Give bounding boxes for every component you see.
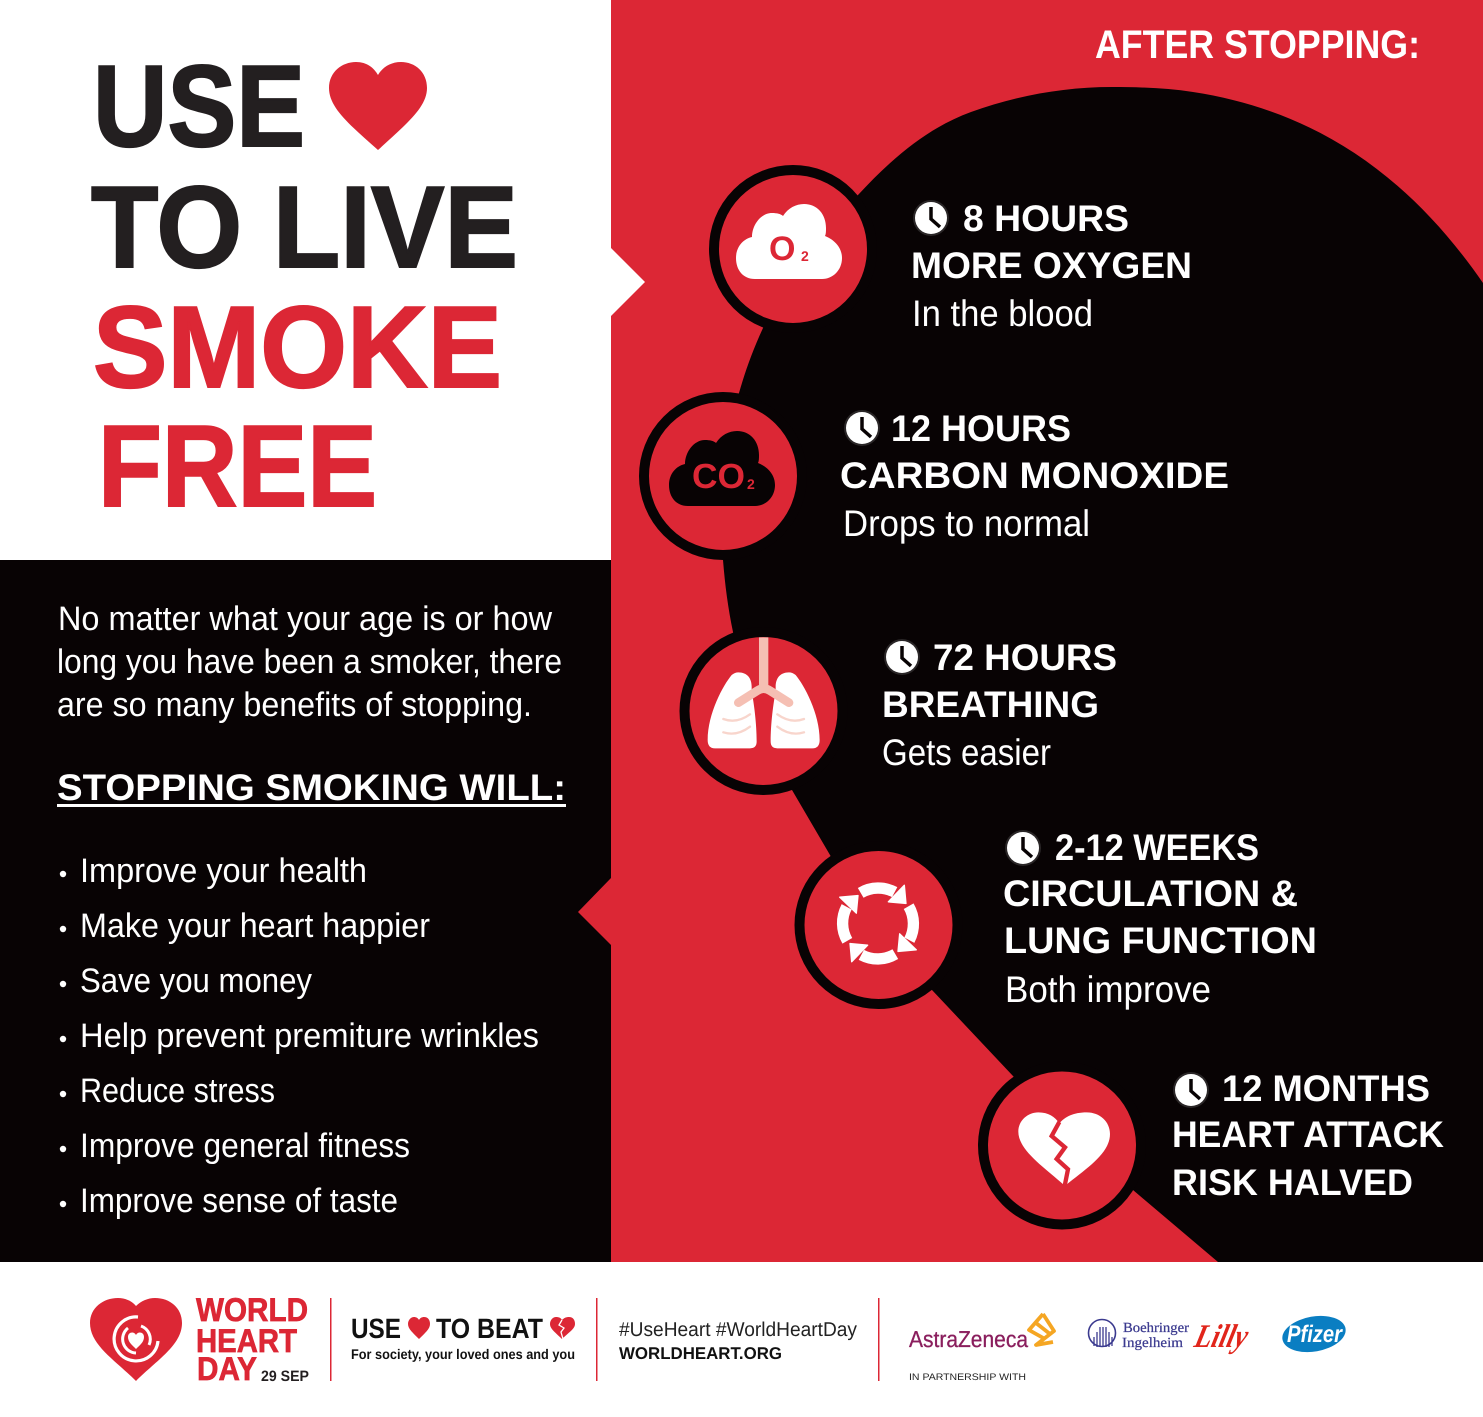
icon: circulation arrows <box>800 846 958 1004</box>
intro text <box>57 600 562 724</box>
step: 12 months <box>983 1066 1444 1224</box>
title line: smoke: SMOKE <box>93 282 502 412</box>
icon: clock <box>913 200 949 236</box>
step text <box>1172 1068 1444 1203</box>
step text: 12 MONTHS <box>1222 1068 1430 1109</box>
benefits list: Improve sense of taste <box>80 1182 398 1220</box>
step: 2-12 weeks <box>800 827 1317 1010</box>
step text <box>840 408 1229 544</box>
intro text: long you have been a smoker, there <box>57 643 562 681</box>
title line: free: FREE <box>98 401 377 531</box>
step text: In the blood <box>912 293 1093 334</box>
logo: lilly: Lilly <box>1190 1319 1252 1355</box>
hashtags and website: #UseHeart #WorldHeartDay <box>619 1319 857 1341</box>
logo: world heart day: DAY <box>197 1350 257 1387</box>
heading: stopping smoking will: STOPPING SMOKING WILL: <box>57 767 566 808</box>
icon: clock <box>844 410 880 446</box>
icon: carbon dioxide cloud: CO <box>692 457 745 496</box>
step text: Gets easier <box>882 732 1051 773</box>
step text: Drops to normal <box>843 503 1090 544</box>
logo: pfizer <box>1279 1311 1349 1357</box>
step text: LUNG FUNCTION <box>1004 920 1317 961</box>
step text: 2-12 WEEKS <box>1055 827 1259 868</box>
panel: title <box>0 0 611 560</box>
icon: oxygen cloud: O <box>769 230 795 268</box>
logo: world heart day <box>90 1291 309 1387</box>
benefits list: Improve general fitness <box>80 1127 410 1165</box>
intro text: No matter what your age is or how <box>58 600 552 638</box>
logo: astrazeneca <box>909 1314 1054 1352</box>
logo: pfizer: Pfizer <box>1287 1321 1343 1348</box>
slogan: use heart to beat: USE <box>351 1313 401 1344</box>
icon: carbon dioxide cloud: 2 <box>747 476 755 492</box>
icon: oxygen cloud <box>714 170 872 328</box>
logo: astrazeneca: AstraZeneca <box>909 1326 1028 1352</box>
logo: world heart day: WORLD <box>196 1291 308 1328</box>
white notch arrow <box>611 248 645 316</box>
step text: BREATHING <box>882 684 1099 725</box>
caption: in partnership with: IN PARTNERSHIP WITH <box>909 1372 1026 1383</box>
red notch arrow <box>578 878 611 945</box>
step text: CARBON MONOXIDE <box>840 455 1229 496</box>
step text: 12 HOURS <box>891 408 1071 449</box>
slogan: use heart to beat: TO BEAT <box>436 1313 543 1344</box>
black curved shape <box>721 87 1483 1262</box>
benefits list: Save you money <box>80 962 312 1000</box>
title line: to live: TO LIVE <box>91 162 518 292</box>
benefits list <box>60 852 539 1220</box>
icon: clock <box>884 639 920 675</box>
step text: 72 HOURS <box>933 637 1117 678</box>
hashtags and website <box>619 1319 857 1363</box>
title line: use: USE <box>93 41 305 171</box>
panel: after stopping timeline <box>578 0 1483 1262</box>
step text <box>911 198 1192 334</box>
logo: boehringer ingelheim <box>1088 1320 1189 1351</box>
step text: RISK HALVED <box>1172 1162 1413 1203</box>
step text <box>1003 827 1317 1010</box>
step: 72 hours <box>684 632 1117 790</box>
step text: Both improve <box>1005 969 1211 1010</box>
step text: CIRCULATION & <box>1003 873 1298 914</box>
benefits list: Reduce stress <box>80 1072 275 1110</box>
logo: boehringer ingelheim: Boehringer <box>1123 1321 1189 1336</box>
step text: MORE OXYGEN <box>911 245 1192 286</box>
logo: boehringer ingelheim: Ingelheim <box>1122 1336 1183 1351</box>
logo: world heart day: HEART <box>196 1322 297 1359</box>
icon: oxygen cloud: 2 <box>801 248 809 264</box>
icon: broken heart <box>983 1066 1141 1224</box>
logo: world heart day: 29 SEP <box>261 1368 309 1385</box>
benefits list: Make your heart happier <box>80 907 430 945</box>
slogan: use heart to beat <box>351 1313 575 1362</box>
footer <box>90 1291 1349 1387</box>
step: 12 hours <box>644 397 1229 555</box>
step text <box>882 637 1117 773</box>
slogan: use heart to beat: For society, your loved ones and you <box>351 1346 575 1362</box>
step text: 8 HOURS <box>963 198 1129 239</box>
icon: lungs <box>684 632 842 790</box>
benefits list: Help prevent premiture wrinkles <box>80 1017 539 1055</box>
benefits list: Improve your health <box>80 852 367 890</box>
intro text: are so many benefits of stopping. <box>57 686 532 724</box>
step: 8 hours <box>714 170 1192 334</box>
icon: title heart <box>329 62 427 150</box>
icon: carbon dioxide cloud <box>644 397 802 555</box>
icon: clock <box>1005 830 1041 866</box>
panel: stopping smoking benefits <box>0 560 611 1262</box>
heading: after stopping: AFTER STOPPING: <box>1095 23 1420 67</box>
hashtags and website: WORLDHEART.ORG <box>619 1344 782 1363</box>
icon: clock <box>1173 1072 1209 1108</box>
step text: HEART ATTACK <box>1172 1114 1444 1155</box>
icon: logo heart <box>90 1298 182 1381</box>
